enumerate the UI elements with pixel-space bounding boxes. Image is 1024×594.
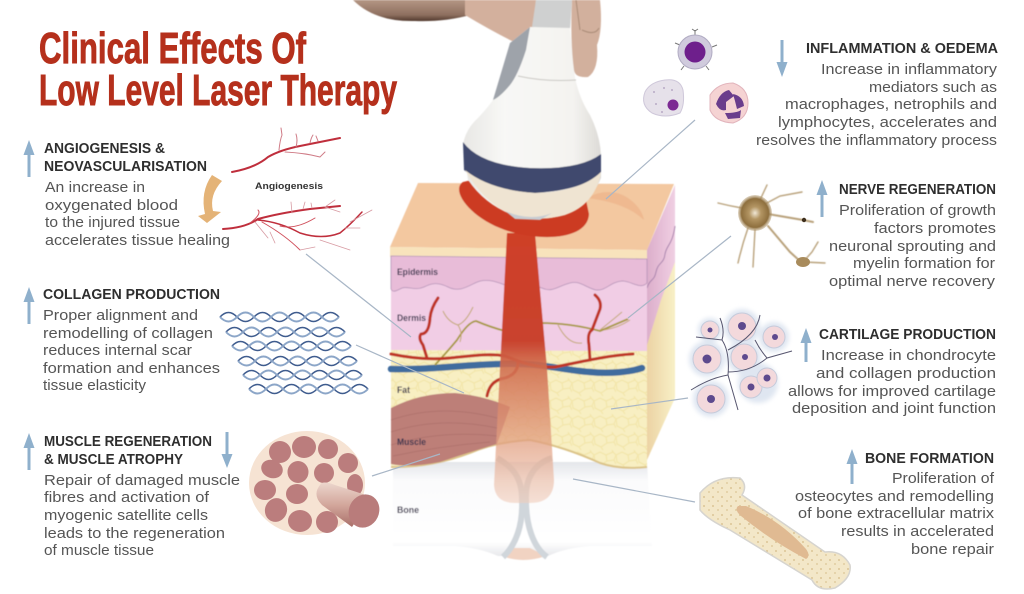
heading: MUSCLE REGENERATION bbox=[44, 434, 212, 450]
panel: collagen production bbox=[24, 287, 220, 394]
panel: muscle regeneration: myogenic satellite cells bbox=[44, 507, 208, 524]
heading: NERVE REGENERATION bbox=[839, 182, 996, 198]
icon: collagen strands bbox=[220, 312, 368, 394]
panel: angiogenesis: oxygenated blood bbox=[45, 197, 178, 214]
nerve fibres bbox=[435, 307, 630, 365]
body text: Increase in inflammatory bbox=[821, 61, 997, 78]
arrow down bbox=[222, 432, 232, 468]
heading: ANGIOGENESIS & bbox=[44, 141, 165, 157]
panel: bone formation: bone repair bbox=[911, 541, 994, 558]
icon: muscle cross-section bbox=[249, 431, 385, 535]
icon: neuron bbox=[718, 185, 825, 267]
panel: bone formation: of bone extracellular matrix bbox=[798, 505, 994, 522]
fibre cylinder bbox=[316, 482, 372, 527]
panel: inflammation and oedema bbox=[756, 40, 999, 149]
panel: cartilage production: and collagen production bbox=[816, 365, 996, 382]
panel: muscle regeneration: & MUSCLE ATROPHY bbox=[44, 452, 183, 468]
heading: BONE FORMATION bbox=[865, 451, 994, 467]
bone layer bbox=[393, 458, 652, 560]
layer labels bbox=[397, 267, 438, 448]
body text: Proliferation of growth bbox=[839, 202, 996, 219]
heading: COLLAGEN PRODUCTION bbox=[43, 287, 220, 303]
skin tissue block diagram bbox=[390, 178, 675, 560]
arrow up bbox=[24, 287, 34, 324]
layer labels: Dermis bbox=[397, 313, 426, 324]
arteries bbox=[391, 295, 633, 396]
vessel after bbox=[223, 200, 372, 250]
panel: muscle regeneration: fibres and activation of bbox=[44, 489, 210, 506]
probe body bbox=[463, 27, 601, 219]
icon: cartilage cells bbox=[689, 309, 792, 417]
bone layer: Bone bbox=[397, 505, 419, 516]
right side face bbox=[647, 185, 675, 460]
neutrophil bbox=[710, 83, 748, 123]
layer labels: Muscle bbox=[397, 437, 426, 448]
arrow up bbox=[816, 180, 828, 217]
angiogenesis label: Angiogenesis bbox=[255, 181, 323, 192]
macrophage bbox=[644, 80, 684, 116]
panel: collagen production: formation and enhances bbox=[43, 360, 220, 377]
icon: blood vessels before and after angiogenesis bbox=[223, 128, 372, 250]
laser probe held by hand bbox=[353, 0, 601, 220]
icon: inflammatory cells bbox=[644, 29, 748, 123]
panel: angiogenesis bbox=[24, 140, 230, 249]
panel: inflammation and oedema: lymphocytes, accelerates and bbox=[778, 114, 997, 131]
title bbox=[39, 24, 397, 115]
title: Low Level Laser Therapy bbox=[39, 66, 397, 115]
body text: Proliferation of bbox=[892, 470, 995, 487]
arrow: curved orange bbox=[198, 175, 222, 223]
heading: CARTILAGE PRODUCTION bbox=[819, 327, 996, 343]
epidermis wavy layer bbox=[391, 256, 647, 291]
cream epidermis strip bbox=[390, 247, 647, 260]
panel: collagen production: reduces internal scar bbox=[43, 342, 192, 359]
arrow up bbox=[24, 140, 34, 177]
panel: bone formation: results in accelerated bbox=[841, 523, 994, 540]
panel: inflammation and oedema: mediators such as bbox=[869, 79, 997, 96]
layer labels: Fat bbox=[397, 385, 411, 396]
panel: nerve regeneration: factors promotes bbox=[874, 220, 996, 237]
inflamed bump bbox=[586, 192, 644, 220]
body text: Increase in chondrocyte bbox=[821, 347, 996, 364]
arrow up bbox=[800, 328, 812, 362]
panel: muscle regeneration bbox=[24, 432, 240, 559]
panel: nerve regeneration: optimal nerve recovery bbox=[829, 273, 995, 290]
body text: Proper alignment and bbox=[43, 307, 198, 324]
body text: An increase in bbox=[45, 179, 145, 196]
panel: angiogenesis: accelerates tissue healing bbox=[45, 232, 230, 249]
leader lines bbox=[306, 120, 731, 502]
panel: nerve regeneration bbox=[816, 180, 996, 290]
panel: bone formation bbox=[795, 449, 995, 558]
hand bbox=[353, 0, 470, 21]
heading: INFLAMMATION & OEDEMA bbox=[806, 41, 999, 57]
beam of laser light bbox=[494, 233, 554, 503]
panel: inflammation and oedema: resolves the inflammatory process bbox=[756, 132, 997, 149]
top skin surface bbox=[390, 183, 674, 250]
panel: nerve regeneration: myelin formation for bbox=[853, 255, 995, 272]
panel: inflammation and oedema: macrophages, netrophils and bbox=[785, 96, 997, 113]
panel: cartilage production: allows for improved cartilage bbox=[788, 383, 996, 400]
panel: collagen production: remodelling of collagen bbox=[43, 325, 213, 342]
panel: nerve regeneration: neuronal sprouting and bbox=[829, 238, 996, 255]
lymphocyte bbox=[675, 29, 717, 70]
muscle layer bbox=[391, 393, 510, 466]
panel: angiogenesis: NEOVASCULARISATION bbox=[44, 159, 207, 175]
body text: Repair of damaged muscle bbox=[44, 472, 240, 489]
red laser spot bbox=[459, 178, 589, 237]
panel: bone formation: osteocytes and remodelling bbox=[795, 488, 994, 505]
panel: muscle regeneration: of muscle tissue bbox=[44, 542, 154, 559]
finger right bbox=[571, 0, 601, 77]
arrow up bbox=[24, 433, 34, 470]
probe underside bbox=[465, 170, 601, 219]
icon: long bone bbox=[700, 478, 850, 589]
panel: muscle regeneration: leads to the regeneration bbox=[44, 525, 225, 542]
layer labels: Epidermis bbox=[397, 267, 438, 278]
probe neck bbox=[532, 0, 572, 30]
dermis layer bbox=[391, 256, 647, 351]
arrow down bbox=[776, 40, 788, 77]
vein bbox=[391, 364, 642, 373]
panel: cartilage production bbox=[788, 327, 996, 417]
fat layer bbox=[391, 345, 647, 468]
blue band bbox=[463, 142, 601, 193]
title: Clinical Effects Of bbox=[39, 24, 306, 73]
vessel before bbox=[232, 128, 340, 172]
arrow up bbox=[846, 449, 858, 484]
panel: cartilage production: deposition and joint function bbox=[792, 400, 996, 417]
panel: angiogenesis: to the injured tissue bbox=[45, 214, 180, 231]
panel: collagen production: tissue elasticity bbox=[43, 377, 146, 394]
